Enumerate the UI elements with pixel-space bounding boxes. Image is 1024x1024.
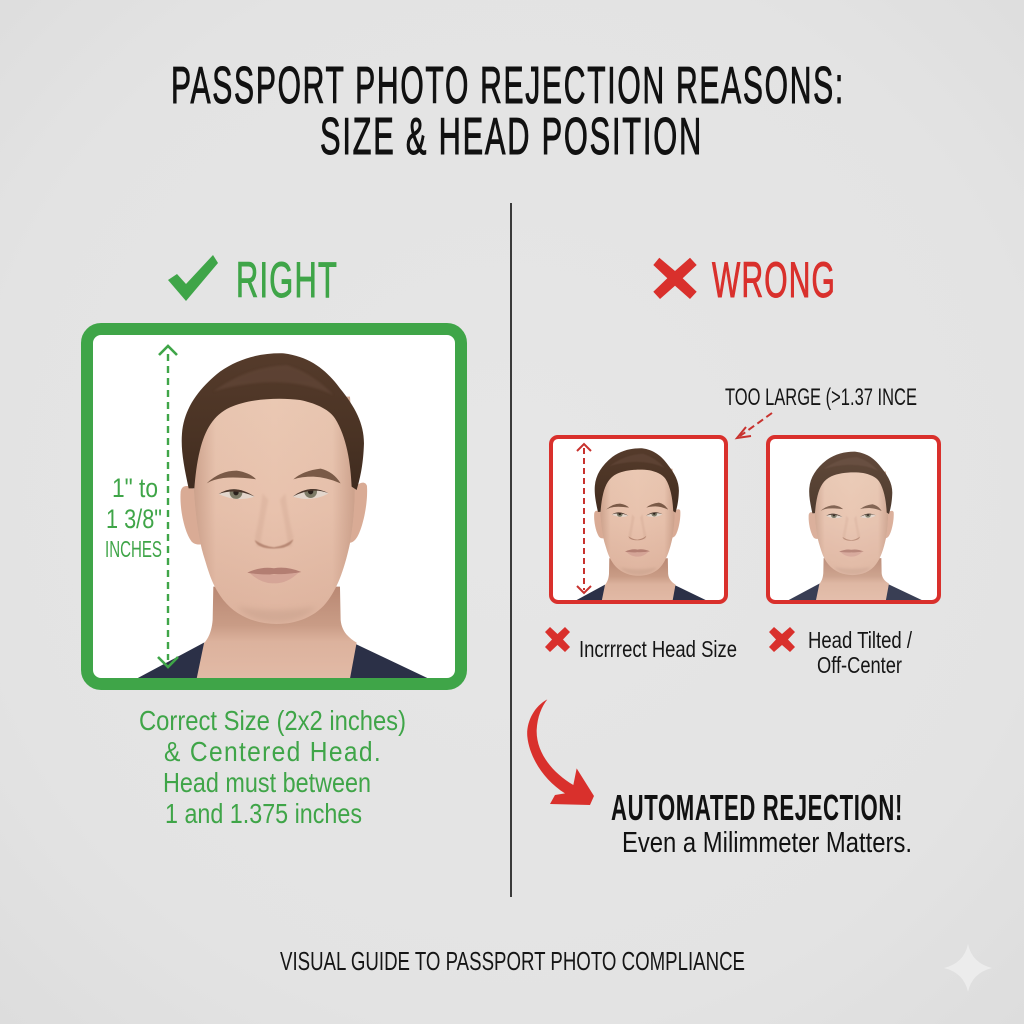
center divider xyxy=(510,203,512,897)
icon: small cross xyxy=(545,627,570,652)
title xyxy=(171,57,845,166)
right label: RIGHT xyxy=(236,252,338,308)
wrong label: WRONG xyxy=(712,252,836,308)
panel: head tilted xyxy=(768,437,939,602)
rejection callout: Even a Milimmeter Matters. xyxy=(622,827,912,859)
label: incorrect head size xyxy=(545,627,737,662)
too large callout: TOO LARGE (>1.37 INCE xyxy=(725,384,917,411)
too large callout xyxy=(725,384,917,438)
arrow: curved red xyxy=(527,699,594,805)
measurement arrow xyxy=(158,346,178,667)
panel: incorrect head size xyxy=(551,437,726,602)
label: head tilted xyxy=(769,627,912,678)
icon: sparkle xyxy=(944,944,992,992)
correct photo caption: & Centered Head. xyxy=(164,736,382,767)
measurement label: 1" to xyxy=(112,473,158,503)
icon: green check xyxy=(168,255,218,301)
right heading xyxy=(168,252,338,308)
correct photo caption xyxy=(139,705,406,829)
correct photo caption: Head must between xyxy=(163,767,371,798)
icon: red cross xyxy=(653,258,697,299)
measurement label: INCHES xyxy=(105,536,162,562)
measurement label: 1 3/8" xyxy=(106,504,162,534)
measurement arrow xyxy=(577,444,591,593)
label: head tilted: Head Tilted / xyxy=(808,627,912,653)
panel: correct photo xyxy=(87,329,461,684)
label: incorrect head size: Incrrrect Head Size xyxy=(579,636,737,662)
portrait: incorrect head size xyxy=(574,448,709,602)
portrait: head tilted xyxy=(789,452,922,600)
measurement label xyxy=(105,473,162,562)
label: head tilted: Off-Center xyxy=(817,652,902,678)
footer: VISUAL GUIDE TO PASSPORT PHOTO COMPLIANCE xyxy=(280,946,745,976)
rejection callout xyxy=(611,787,912,859)
icon: small cross xyxy=(769,627,795,652)
portrait: correct size xyxy=(137,353,429,679)
title: SIZE & HEAD POSITION xyxy=(320,108,703,166)
correct photo caption: Correct Size (2x2 inches) xyxy=(139,705,406,736)
wrong heading xyxy=(653,252,836,308)
callout arrow xyxy=(737,413,772,438)
correct photo caption: 1 and 1.375 inches xyxy=(165,798,362,829)
